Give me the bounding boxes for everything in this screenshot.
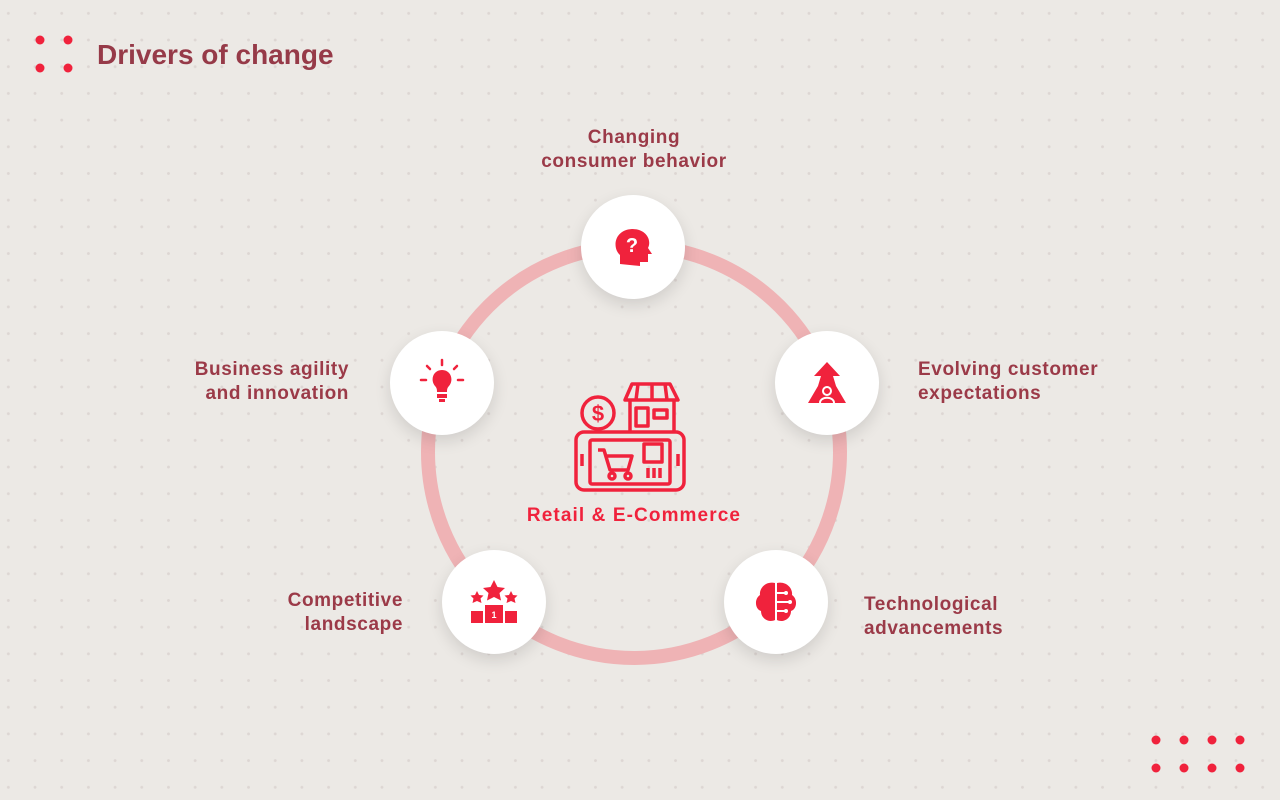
center label: Retail & E-Commerce (527, 505, 741, 526)
center icon (574, 382, 686, 492)
label: agility: Business agility (195, 359, 349, 380)
title: Drivers of change (97, 39, 334, 70)
label: competitive: landscape (305, 614, 403, 635)
label: expectations (918, 359, 1098, 404)
label: consumer behavior (541, 127, 727, 172)
label: competitive: Competitive (288, 590, 403, 611)
node: consumer behavior (581, 195, 685, 299)
label: consumer behavior: consumer behavior (541, 151, 727, 172)
label: expectations: expectations (918, 383, 1041, 404)
logo dots (36, 36, 72, 72)
label: consumer behavior: Changing (588, 127, 680, 148)
label: agility (195, 359, 349, 404)
label: competitive (288, 590, 403, 635)
node: competitive (442, 550, 546, 654)
node: technological (724, 550, 828, 654)
node: expectations (775, 331, 879, 435)
label: technological: Technological (864, 594, 998, 615)
node: agility (390, 331, 494, 435)
label: technological: advancements (864, 618, 1003, 639)
label: expectations: Evolving customer (918, 359, 1098, 380)
label: technological (864, 594, 1003, 639)
node: competitive: 1 (491, 610, 497, 620)
center icon: $ (592, 401, 604, 426)
label: agility: and innovation (205, 383, 349, 404)
node: consumer behavior: ? (626, 235, 638, 257)
corner dots (1152, 736, 1244, 772)
